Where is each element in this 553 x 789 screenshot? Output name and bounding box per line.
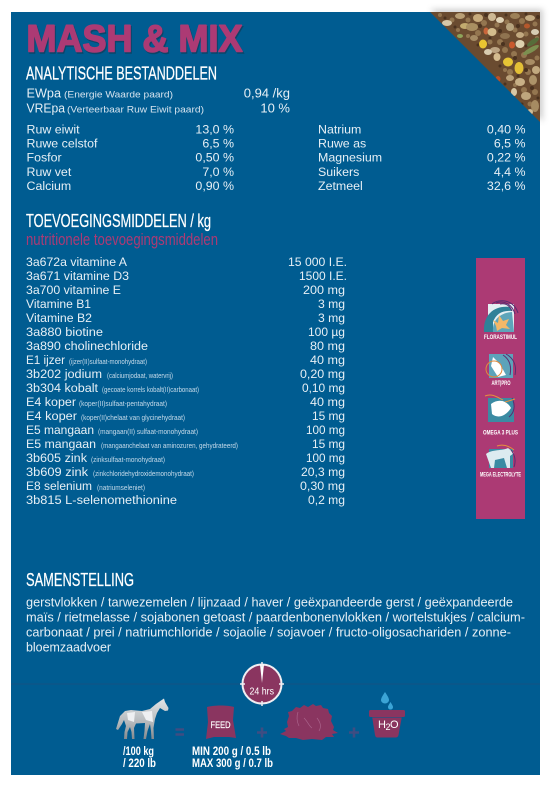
additives values: 20,3 mg bbox=[301, 465, 345, 479]
label: florastimul: FLORASTIMUL bbox=[484, 335, 517, 341]
icon: 24 hour clock: 24 hrs bbox=[250, 686, 274, 698]
additives names: (mangaanchelaat van aminozuren, gehydrateerd) bbox=[101, 441, 238, 450]
feed amount label: MAX 300 g / 0.7 lb bbox=[192, 756, 273, 770]
analysis table: left column: 6,5 % bbox=[202, 136, 234, 150]
heading: samenstelling: SAMENSTELLING bbox=[26, 570, 134, 590]
horse weight label bbox=[123, 744, 156, 770]
icon: mega electrolyte bbox=[486, 445, 515, 468]
analysis table: right column: Ruwe as bbox=[318, 136, 366, 150]
additives values: 0,2 mg bbox=[308, 493, 345, 507]
additives values: 15 000 I.E. bbox=[288, 255, 347, 269]
additives values: 0,10 mg bbox=[302, 381, 345, 395]
composition text: maïs / rietmelasse / sojabonen getoast / paardenbonenvlokken / wortelstukjes / calcium- bbox=[26, 610, 525, 624]
additives names: E8 selenium bbox=[26, 479, 92, 493]
additives values: 40 mg bbox=[310, 395, 345, 409]
analysis table: left column: Ruw vet bbox=[26, 165, 72, 179]
corner shadow bbox=[430, 9, 543, 122]
additives values: 100 µg bbox=[308, 325, 345, 339]
energy values: 10 % bbox=[260, 100, 290, 116]
icon: water bucket with drops: H bbox=[378, 719, 386, 731]
analysis table: left column: Ruw eiwit bbox=[26, 122, 80, 136]
additives values: 0,30 mg bbox=[300, 479, 345, 493]
label: art pro: ART|PRO bbox=[492, 381, 511, 387]
title: MASH & MIX bbox=[28, 20, 244, 62]
plus sign bbox=[349, 728, 359, 738]
energy values: VREpa bbox=[26, 100, 66, 116]
composition text: gerstvlokken / tarwezemelen / lijnzaad / haver / geëxpandeerde gerst / geëxpandeerde bbox=[26, 594, 513, 610]
feed amount label: MIN 200 g / 0.5 lb bbox=[192, 744, 271, 758]
energy values: EWpa bbox=[26, 86, 62, 100]
icon: art pro bbox=[486, 354, 516, 378]
icon: 24 hour clock bbox=[240, 662, 284, 706]
analysis table: right column: 0,40 % bbox=[487, 122, 526, 136]
composition text bbox=[26, 594, 525, 654]
icon: florastimul bbox=[484, 301, 518, 332]
analysis table: left column: Fosfor bbox=[26, 150, 62, 164]
additives names: E5 mangaan bbox=[26, 437, 96, 451]
equals sign bbox=[176, 730, 184, 734]
analysis table: left column bbox=[26, 122, 234, 193]
label: mega electrolyte: MEGA ELECTROLYTE bbox=[480, 472, 521, 478]
additives names: E4 koper bbox=[26, 409, 77, 423]
subheading: nutritionele toevoegingsmiddelen: nutritionele toevoegingsmiddelen bbox=[26, 230, 218, 249]
plus sign bbox=[257, 728, 267, 738]
additives values: 1500 I.E. bbox=[299, 269, 347, 283]
additives names: 3b202 jodium bbox=[26, 367, 102, 381]
icon: feed bag: FEED bbox=[210, 720, 231, 731]
additives names: 3a880 biotine bbox=[26, 325, 103, 339]
additives names: 3b605 zink bbox=[26, 451, 88, 465]
icon: water bucket with drops: O bbox=[390, 719, 399, 731]
additives names: (mangaan(II) sulfaat-monohydraat) bbox=[98, 427, 198, 436]
additives names: 3b609 zink bbox=[26, 465, 89, 479]
additives names: (ijzer(II)sulfaat-monohydraat) bbox=[69, 357, 147, 366]
icon: feed bag bbox=[206, 706, 236, 739]
additives names bbox=[26, 255, 238, 507]
additives values: 100 mg bbox=[306, 451, 345, 465]
composition text: carbonaat / prei / natriumchloride / sojaolie / sojavoer / fructo-oligosachariden / zonne- bbox=[26, 624, 511, 640]
additives names: (gecoate korrels kobalt(II)carbonaat) bbox=[102, 385, 199, 394]
analysis table: left column: Calcium bbox=[26, 179, 71, 193]
energy values: (Verteerbaar Ruw Eiwit paard) bbox=[67, 104, 204, 114]
additives names: 3a672a vitamine A bbox=[26, 255, 128, 269]
analysis table: right column: 6,5 % bbox=[494, 136, 526, 150]
additives values: 3 mg bbox=[318, 311, 345, 325]
analysis table: left column: 0,90 % bbox=[195, 179, 234, 193]
heading: analytische bestanddelen: ANALYTISCHE BESTANDDELEN bbox=[26, 64, 217, 84]
analysis table: right column: 0,22 % bbox=[487, 150, 526, 164]
food photo corner bbox=[430, 12, 540, 122]
additives values: 3 mg bbox=[318, 297, 345, 311]
additives values bbox=[288, 255, 347, 507]
heading: toevoegingsmiddelen: TOEVOEGINGSMIDDELEN / kg bbox=[26, 211, 211, 231]
analysis table: right column: 32,6 % bbox=[487, 179, 526, 193]
analysis table: right column: Natrium bbox=[318, 122, 361, 136]
analysis table: right column: Magnesium bbox=[318, 150, 382, 164]
additives names: E1 ijzer bbox=[26, 353, 65, 367]
icon: water bucket with drops: 2 bbox=[386, 722, 391, 732]
additives names: 3a890 cholinechloride bbox=[26, 339, 148, 353]
horse weight label: / 220 lb bbox=[123, 756, 156, 770]
horse weight label: /100 kg bbox=[123, 744, 154, 758]
label: omega 3 plus: OMEGA 3 PLUS bbox=[483, 430, 518, 436]
additives names: Vitamine B1 bbox=[26, 297, 91, 311]
icon: hay bbox=[280, 704, 338, 740]
additives values: 0,20 mg bbox=[300, 367, 345, 381]
additives names: (natriumseleniet) bbox=[97, 483, 145, 492]
additives names: E5 mangaan bbox=[26, 423, 94, 437]
additives names: 3b815 L-selenomethionine bbox=[26, 493, 177, 507]
analysis table: left column: 13,0 % bbox=[195, 122, 234, 136]
title: MASH & MIX bbox=[26, 18, 243, 60]
additives names: (zinkchloridehydroxidemonohydraat) bbox=[93, 469, 194, 478]
additives names: 3b304 kobalt bbox=[26, 381, 99, 395]
analysis table: right column bbox=[318, 122, 526, 193]
additives values: 15 mg bbox=[312, 437, 345, 451]
analysis table: left column: 0,50 % bbox=[195, 150, 234, 164]
analysis table: right column: 4,4 % bbox=[494, 165, 526, 179]
energy values bbox=[26, 86, 290, 116]
analysis table: left column: Ruwe celstof bbox=[26, 136, 98, 150]
energy values: 0,94 /kg bbox=[244, 86, 290, 100]
feed amount label bbox=[192, 744, 273, 770]
additives values: 80 mg bbox=[310, 339, 345, 353]
icon: omega 3 plus bbox=[485, 395, 515, 422]
additives names: E4 koper bbox=[26, 395, 76, 409]
additives names: (zinksulfaat-monohydraat) bbox=[91, 455, 165, 464]
additives names: 3a700 vitamine E bbox=[26, 283, 121, 297]
additives names: (calciumjodaat, watervrij) bbox=[107, 371, 173, 380]
icon: water bucket with drops bbox=[369, 692, 405, 738]
icon: horse bbox=[116, 698, 168, 739]
additives values: 15 mg bbox=[312, 409, 345, 423]
additives names: Vitamine B2 bbox=[26, 311, 92, 325]
energy values: (Energie Waarde paard) bbox=[64, 90, 173, 100]
additives values: 40 mg bbox=[310, 353, 345, 367]
composition text: bloemzaadvoer bbox=[26, 640, 112, 654]
panel: product badges bbox=[476, 258, 525, 519]
additives names: 3a671 vitamine D3 bbox=[26, 269, 129, 283]
additives names: (koper(II)sulfaat-pentahydraat) bbox=[79, 399, 167, 408]
analysis table: right column: Zetmeel bbox=[318, 179, 363, 193]
additives names: (koper(II)chelaat van glycinehydraat) bbox=[81, 413, 185, 422]
additives values: 200 mg bbox=[303, 283, 345, 297]
additives values: 100 mg bbox=[306, 423, 345, 437]
analysis table: right column: Suikers bbox=[318, 165, 359, 179]
analysis table: left column: 7,0 % bbox=[202, 165, 234, 179]
